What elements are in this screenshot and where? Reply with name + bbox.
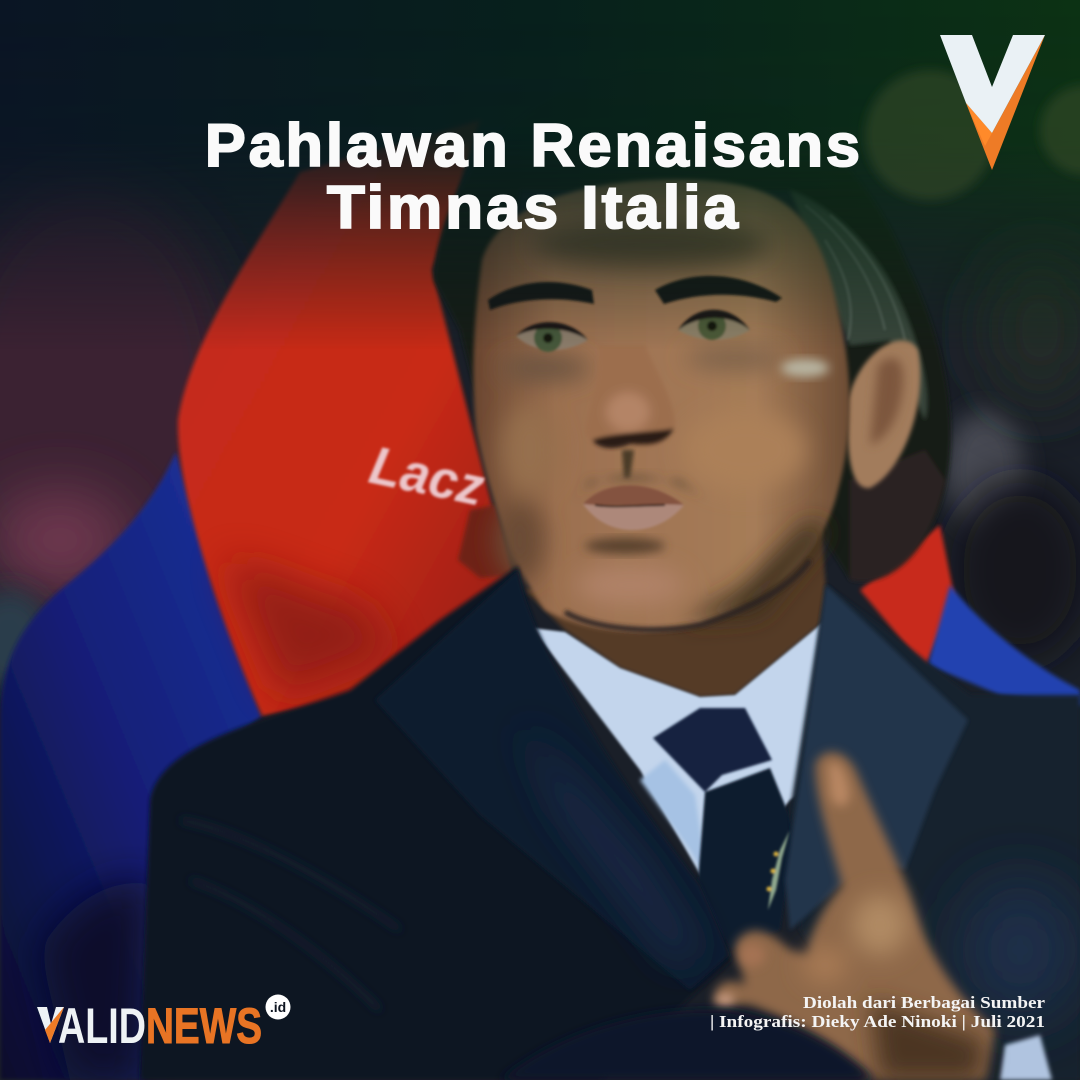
title: Timnas Italia	[327, 174, 741, 241]
coach: tie	[653, 708, 795, 950]
chin fold line	[565, 560, 810, 630]
shirt cuff	[1000, 1035, 1052, 1080]
headrest fold shadows	[225, 560, 395, 695]
under lip shadow	[585, 538, 665, 554]
coach: moustache shadow	[575, 476, 705, 500]
logo: Validnews.id: ALID	[58, 998, 146, 1054]
source and credit text	[710, 993, 1046, 1031]
fingertip highlights	[716, 762, 850, 1006]
coach: suit jacket left body	[140, 566, 732, 1080]
coach: shirt collar	[532, 620, 826, 895]
coach: philtrum stubble	[622, 450, 634, 478]
logo: Validnews.id: NEWS	[146, 998, 262, 1054]
coach: mouth	[583, 485, 684, 530]
suit left lapel	[375, 570, 730, 990]
logo: Validnews.id: .id	[270, 999, 286, 1015]
blurred bokeh lights	[865, 70, 1080, 200]
bench seat: inner dark shadow	[40, 880, 150, 1080]
coach: hair mass	[434, 72, 951, 582]
coach: hair lock on neck left	[458, 505, 512, 578]
title: Pahlawan Renaisans	[205, 112, 863, 179]
bench seat: blue side left	[0, 452, 262, 1080]
coach: right eyebrow	[655, 276, 782, 304]
bench seat: red headrest	[178, 120, 510, 716]
coach: left eye	[516, 322, 588, 352]
coach: right eye	[678, 310, 750, 340]
suit lapel sheen	[520, 720, 700, 965]
bench seat: right red panel	[860, 525, 955, 668]
suit right lapel	[785, 585, 968, 930]
coach: neck	[525, 510, 828, 697]
logo: V mark	[940, 35, 1045, 170]
shirt fold shadow	[640, 760, 708, 880]
hair strands	[805, 205, 905, 340]
suit right body	[790, 585, 1080, 1080]
source and credit text: | Infografis: Dieky Ade Ninoki | Juli 2021	[710, 1012, 1045, 1031]
coach: gesturing hand	[715, 752, 995, 1080]
dark sleeve foreground	[500, 1009, 875, 1080]
sponsor lettering on seat: Lacz	[365, 435, 489, 518]
tie stars and tricolour badge	[766, 830, 790, 910]
cheek glare	[781, 359, 829, 377]
source and credit text: Diolah dari Berbagai Sumber	[803, 993, 1046, 1012]
coach: face	[473, 179, 850, 632]
suit sleeve folds	[180, 820, 400, 1010]
title	[205, 112, 863, 241]
face shading and highlights	[495, 221, 830, 622]
suit right lower sheen	[960, 880, 1080, 1020]
coach: nose	[585, 345, 675, 448]
coach: ear	[847, 340, 920, 488]
logo: Validnews.id	[37, 994, 290, 1054]
top colour gradient overlay	[0, 0, 1080, 350]
coach: ear inner shadow	[870, 358, 903, 445]
hand highlights	[803, 895, 985, 1080]
bench seat: right blue panel	[928, 585, 1080, 706]
coach: left eyebrow	[488, 282, 594, 310]
